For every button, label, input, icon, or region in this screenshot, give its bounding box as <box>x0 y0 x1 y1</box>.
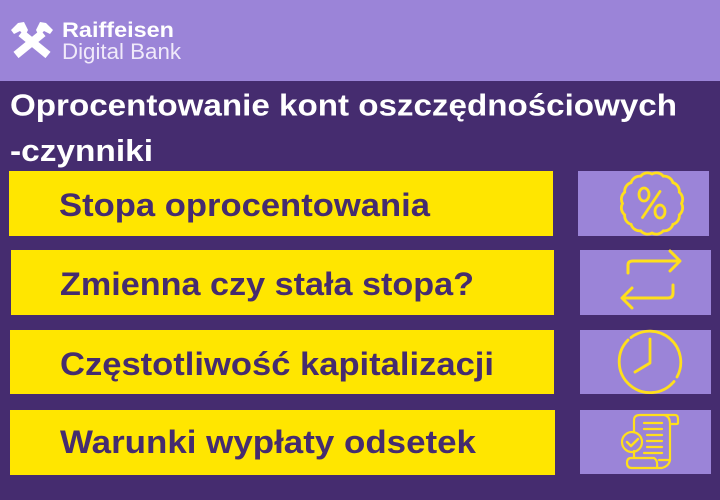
bar label: Stopa oprocentowania: Stopa oprocentowania <box>59 187 431 223</box>
bar label: Warunki wypłaty odsetek <box>10 410 555 475</box>
icon tile: clock <box>580 330 711 394</box>
bar label: Zmienna czy stała stopa?: Zmienna czy stała stopa? <box>60 266 474 302</box>
bar label: Warunki wypłaty odsetek: Warunki wypłaty odsetek <box>60 424 477 460</box>
logo wordmark <box>62 19 182 64</box>
logo wordmark: Raiffeisen <box>62 19 174 42</box>
bar label: Częstotliwość kapitalizacji <box>10 330 554 394</box>
icon tile: swap arrows <box>580 250 711 315</box>
header band <box>0 0 720 81</box>
title <box>10 88 677 168</box>
row 3: capitalisation frequency <box>10 330 711 394</box>
title: Oprocentowanie kont oszczędnościowych <box>10 88 677 122</box>
row 1: interest rate <box>9 171 709 236</box>
bar label: Częstotliwość kapitalizacji: Częstotliwość kapitalizacji <box>60 346 494 382</box>
row 2: variable or fixed rate <box>11 250 711 315</box>
bar label: Stopa oprocentowania <box>9 171 553 236</box>
bar label: Zmienna czy stała stopa? <box>11 250 554 315</box>
logo wordmark: Digital Bank <box>62 39 182 64</box>
title: -czynniki <box>10 133 153 168</box>
icon tile: document with check <box>580 410 711 474</box>
icon: Raiffeisen crossed horses logo <box>11 22 53 55</box>
row 4: interest payout conditions <box>10 410 711 475</box>
icon tile: percent badge <box>578 171 709 236</box>
